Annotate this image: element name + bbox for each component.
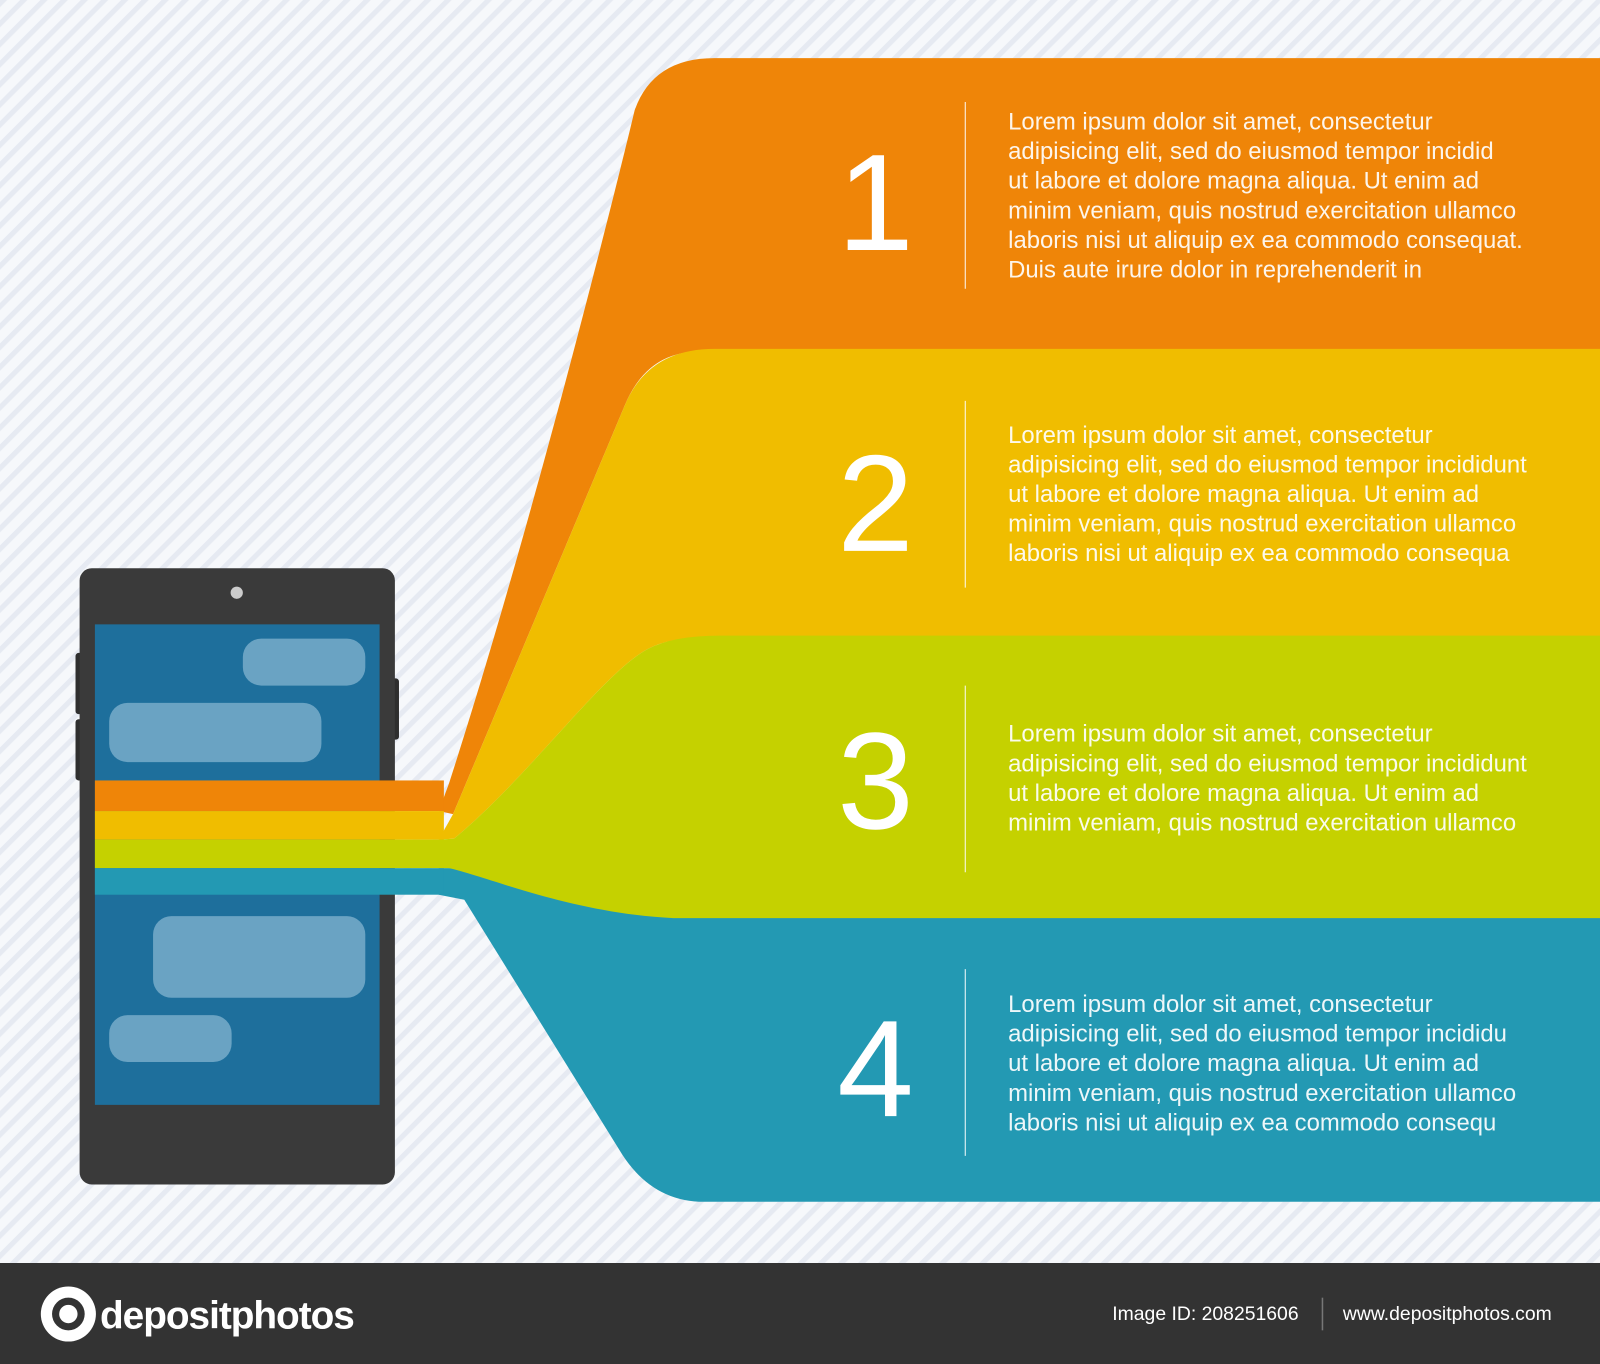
text 4: laboris nisi ut aliquip ex ea commodo consequ bbox=[1008, 1109, 1496, 1136]
text 1: laboris nisi ut aliquip ex ea commodo consequat. bbox=[1008, 227, 1523, 254]
text 4: Lorem ipsum dolor sit amet, consectetur bbox=[1008, 991, 1433, 1018]
ribbon 3 green bbox=[439, 636, 1600, 918]
ribbon 4 blue bbox=[439, 868, 1600, 1202]
text 1 bbox=[1008, 109, 1523, 283]
text 2: laboris nisi ut aliquip ex ea commodo consequa bbox=[1008, 540, 1510, 567]
text 4: adipisicing elit, sed do eiusmod tempor incididu bbox=[1008, 1021, 1507, 1048]
text 1: minim veniam, quis nostrud exercitation ullamco bbox=[1008, 197, 1516, 224]
footer bbox=[0, 1263, 1600, 1364]
ribbon 1 orange bbox=[439, 58, 1600, 814]
numbers: 3 bbox=[837, 704, 914, 858]
footer: www.depositphotos.com bbox=[1342, 1303, 1552, 1325]
numbers: 2 bbox=[837, 427, 914, 581]
text 4 bbox=[1008, 991, 1516, 1136]
text 3 bbox=[1008, 721, 1527, 836]
numbers: 1 bbox=[837, 126, 914, 280]
text 2: adipisicing elit, sed do eiusmod tempor incididunt bbox=[1008, 451, 1527, 478]
footer: depositphotos bbox=[100, 1294, 354, 1337]
text 1: ut labore et dolore magna aliqua. Ut enim ad bbox=[1008, 168, 1479, 195]
phone bbox=[76, 568, 399, 1184]
text 2: ut labore et dolore magna aliqua. Ut enim ad bbox=[1008, 481, 1479, 508]
text 3: minim veniam, quis nostrud exercitation ullamco bbox=[1008, 809, 1516, 836]
text 4: minim veniam, quis nostrud exercitation ullamco bbox=[1008, 1080, 1516, 1107]
text 2: Lorem ipsum dolor sit amet, consectetur bbox=[1008, 422, 1433, 449]
dividers bbox=[964, 102, 966, 1156]
ribbon 2 yellow bbox=[439, 349, 1600, 840]
text 3: Lorem ipsum dolor sit amet, consectetur bbox=[1008, 721, 1433, 748]
numbers bbox=[837, 126, 914, 1146]
text 2 bbox=[1008, 422, 1527, 567]
numbers: 4 bbox=[837, 992, 914, 1146]
text 1: Lorem ipsum dolor sit amet, consectetur bbox=[1008, 109, 1433, 136]
strips bbox=[95, 780, 444, 895]
text 1: adipisicing elit, sed do eiusmod tempor incidid bbox=[1008, 138, 1494, 165]
text 4: ut labore et dolore magna aliqua. Ut enim ad bbox=[1008, 1050, 1479, 1077]
text 2: minim veniam, quis nostrud exercitation ullamco bbox=[1008, 511, 1516, 538]
footer: Image ID: 208251606 bbox=[1112, 1303, 1299, 1325]
text 3: adipisicing elit, sed do eiusmod tempor incididunt bbox=[1008, 750, 1527, 777]
text 3: ut labore et dolore magna aliqua. Ut enim ad bbox=[1008, 780, 1479, 807]
text 1: Duis aute irure dolor in reprehenderit in bbox=[1008, 256, 1422, 283]
